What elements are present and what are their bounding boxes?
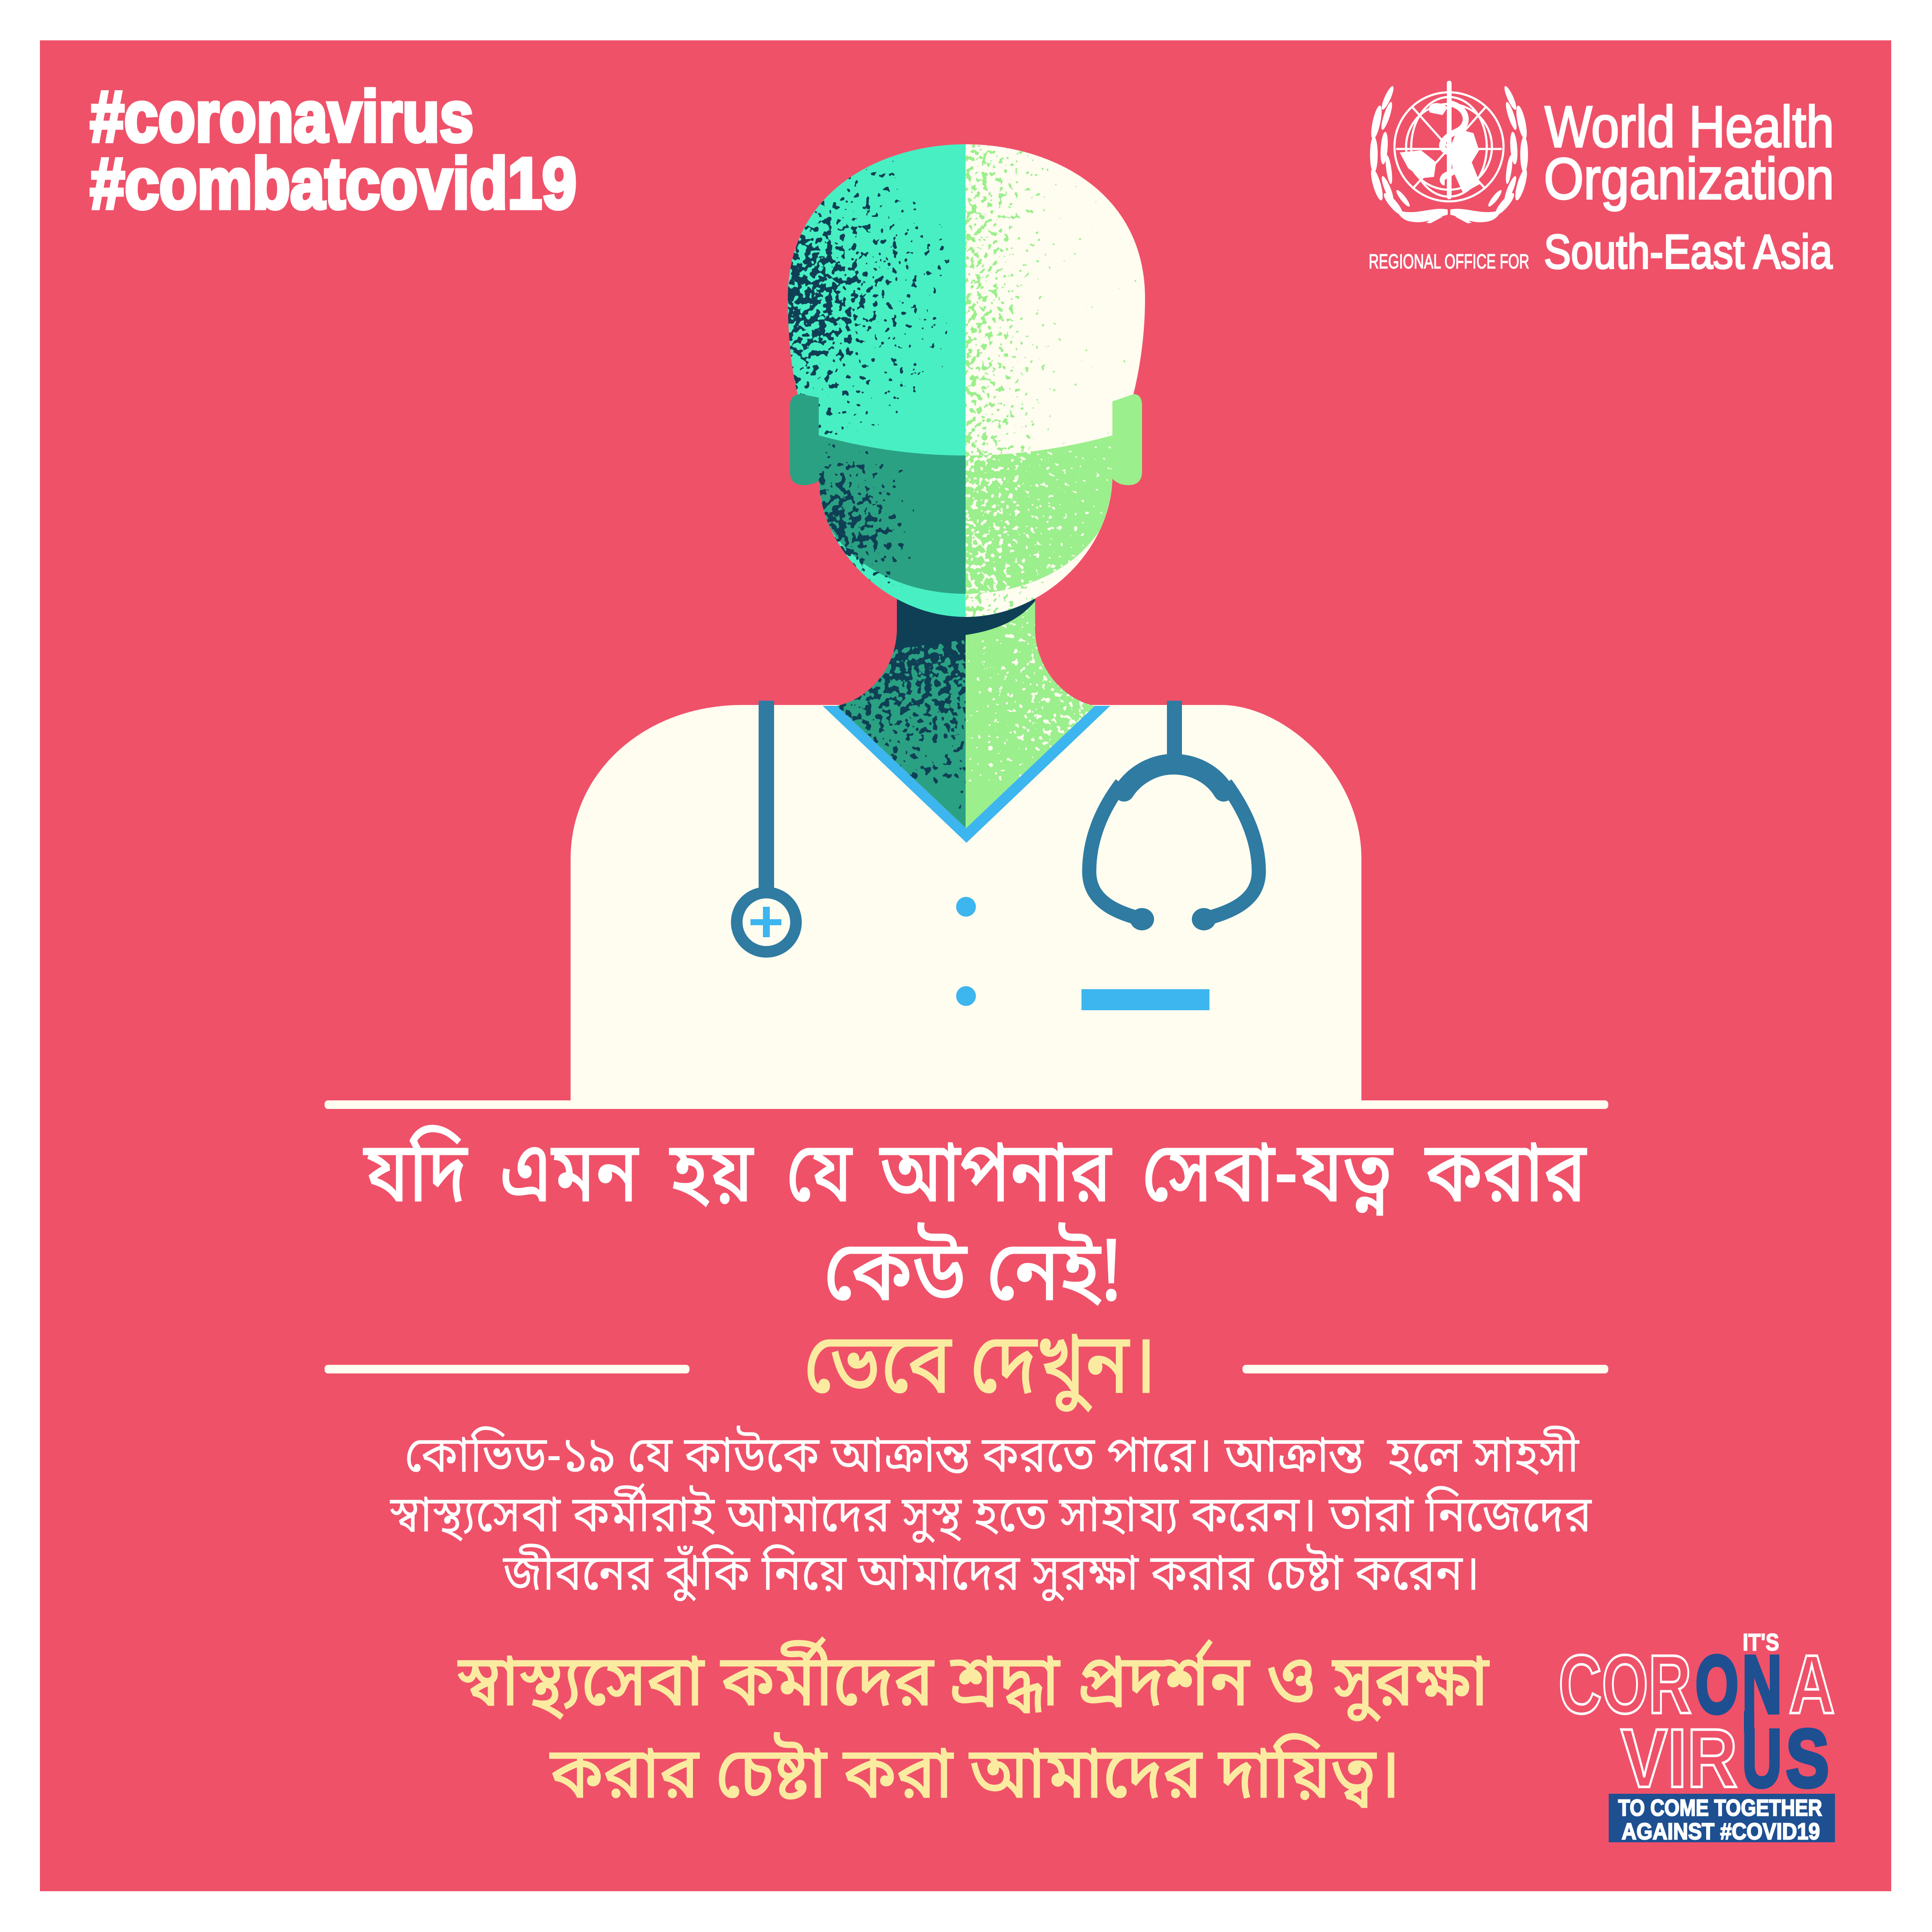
- pocket: [1081, 989, 1209, 1010]
- divider line left: [325, 1365, 690, 1373]
- heading: যে: [786, 1124, 853, 1235]
- heading: কেউ নেই!: [823, 1222, 1122, 1334]
- logo outline letters: A: [1789, 1638, 1835, 1731]
- icon: WHO emblem: [1369, 81, 1529, 223]
- hashtags: [90, 76, 577, 224]
- head: [773, 129, 1159, 644]
- logo filled letters: U: [1742, 1713, 1782, 1804]
- hashtags: #combatcovid19: [90, 143, 577, 224]
- subheading: ভেবে দেখুন।: [804, 1315, 1157, 1427]
- doctor illustration: [571, 129, 1361, 1105]
- divider line right: [1242, 1365, 1608, 1373]
- hashtags: #coronavirus: [90, 76, 474, 157]
- divider line top: [325, 1100, 1608, 1109]
- neck: [816, 592, 1115, 833]
- logo text: World Health Organization: Organization: [1544, 146, 1834, 211]
- logo filled letters: O: [1695, 1639, 1738, 1730]
- left ear strap: [790, 394, 819, 485]
- coat buttons: [956, 897, 976, 1006]
- logo text: World Health Organization: [1369, 94, 1834, 279]
- logo outline letters: VIR: [1621, 1712, 1738, 1805]
- logo word IT'S: IT'S: [1743, 1628, 1779, 1656]
- face mask: [816, 429, 1116, 601]
- campaign logo: [1558, 1628, 1835, 1844]
- logo outline letters: COR: [1558, 1638, 1692, 1731]
- heading: [363, 1124, 1587, 1334]
- body text: জীবনের ঝুঁকি নিয়ে আমাদের সুরক্ষা করার চেষ্টা করেন।: [502, 1543, 1480, 1611]
- stethoscope right tube and earpieces: [1089, 701, 1259, 930]
- logo filled letters: [1695, 1639, 1829, 1804]
- logo filled letters: N: [1742, 1639, 1782, 1730]
- body text: স্বাস্থ্যসেবা কর্মীরাই আমাদের সুস্থ হতে সাহায্য করেন। তারা নিজেদের: [389, 1482, 1592, 1552]
- WHO logo: [1369, 81, 1834, 279]
- campaign logo: TO COME TOGETHER: [1618, 1795, 1822, 1821]
- heading: করার: [1425, 1124, 1587, 1235]
- heading: হয়: [669, 1124, 754, 1235]
- body text: [389, 1425, 1592, 1611]
- stethoscope left tube and chest piece: [737, 701, 796, 952]
- call to action: [458, 1637, 1489, 1826]
- heading: যদি: [363, 1124, 468, 1235]
- call to action: করার চেষ্টা করা আমাদের দায়িত্ব।: [550, 1732, 1400, 1826]
- body text: কোভিড-১৯ যে কাউকে আক্রান্ত করতে পারে। আক্রান্ত হলে সাহসী: [404, 1425, 1580, 1493]
- campaign logo: AGAINST #COVID19: [1622, 1819, 1820, 1844]
- heading: সেবা-যত্ন: [1142, 1124, 1393, 1235]
- logo text: World Health Organization: South-East Asia: [1544, 225, 1833, 279]
- logo text: World Health Organization: World Health: [1545, 94, 1834, 159]
- logo outline letters: [1558, 1638, 1835, 1805]
- collar: [823, 706, 1110, 843]
- logo text: World Health Organization: REGIONAL OFFICE FOR: [1369, 250, 1529, 273]
- heading: এমন: [500, 1124, 639, 1235]
- logo banner: [1609, 1794, 1835, 1842]
- right ear strap: [1112, 394, 1142, 485]
- doctor coat: [571, 705, 1361, 1105]
- logo filled letters: S: [1786, 1713, 1829, 1804]
- call to action: স্বাস্থ্যসেবা কর্মীদের শ্রদ্ধা প্রদর্শন ও সুরক্ষা: [458, 1637, 1489, 1734]
- heading: আপনার: [879, 1124, 1112, 1235]
